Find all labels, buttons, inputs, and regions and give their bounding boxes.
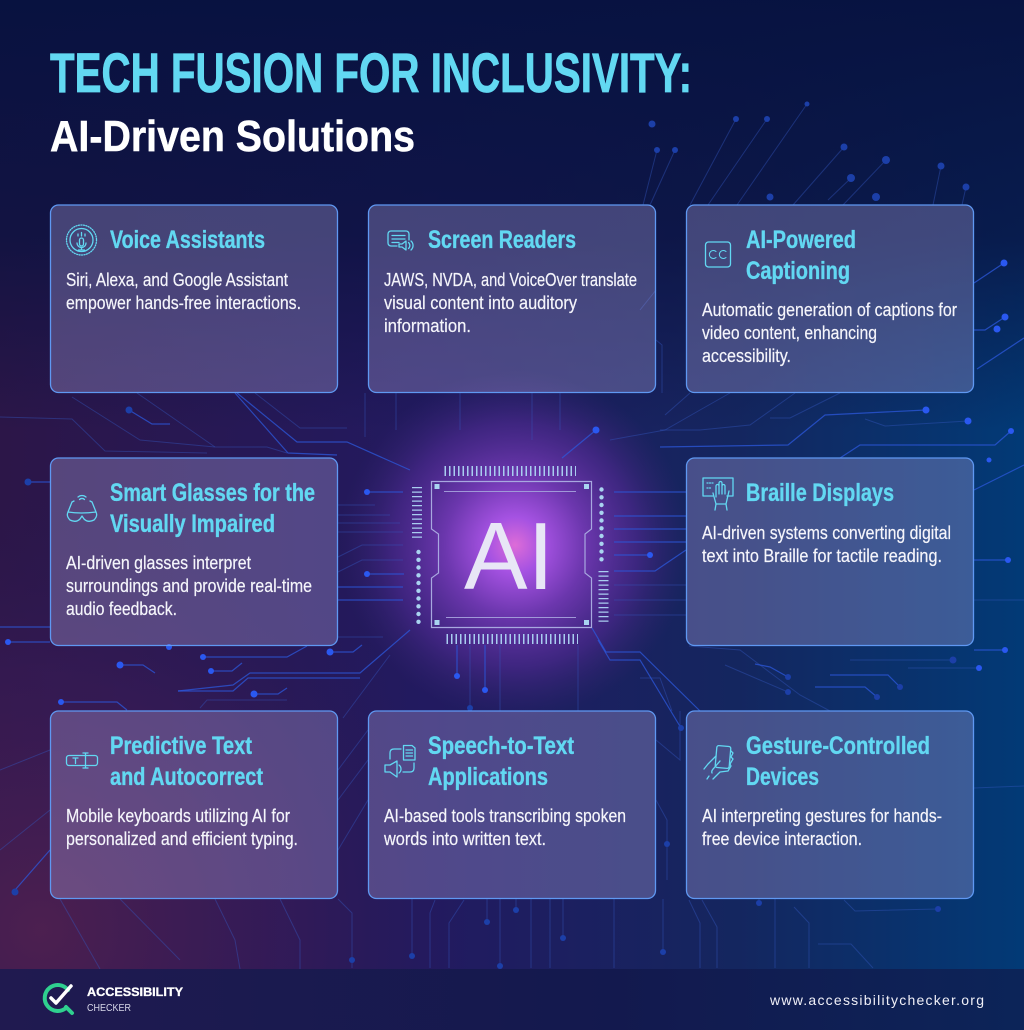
heading: Braille Displays (746, 479, 894, 507)
body text (384, 269, 637, 336)
icon: smart glasses (67, 495, 97, 521)
body text (66, 805, 298, 849)
heading: AI-Powered (746, 226, 856, 254)
panel: Braille Displays (686, 458, 974, 646)
icon: braille hand (703, 478, 733, 510)
icon: speech to document (385, 746, 415, 777)
heading (110, 732, 264, 791)
chip bottom pins (446, 634, 578, 644)
heading: Predictive Text (110, 732, 253, 760)
heading: Captioning (746, 257, 850, 285)
chip left dots (416, 550, 421, 624)
heading (110, 479, 315, 538)
panel: AI-Powered Captioning (686, 205, 974, 392)
heading: and Autocorrect (110, 763, 264, 791)
heading (428, 732, 575, 791)
body text: Siri, Alexa, and Google Assistant (66, 269, 288, 290)
heading (746, 732, 930, 791)
chip left pins (412, 487, 422, 541)
icon: voice microphone (66, 225, 96, 255)
panel: Smart Glasses (50, 458, 338, 646)
body text: free device interaction. (702, 828, 862, 849)
body text: audio feedback. (66, 598, 177, 619)
body text: Mobile keyboards utilizing AI for (66, 805, 290, 826)
chip outline (432, 482, 592, 628)
title: TECH FUSION FOR INCLUSIVITY: (50, 41, 692, 104)
logo wordmark: ACCESSIBILITY (87, 985, 183, 999)
body text (702, 522, 951, 566)
body text: text into Braille for tactile reading. (702, 545, 942, 566)
panel: Gesture-Controlled Devices (686, 711, 974, 898)
body text: personalized and efficient typing. (66, 828, 298, 849)
body text: information. (384, 315, 471, 336)
logo wordmark (87, 985, 183, 1014)
body text (383, 805, 626, 849)
heading: Screen Readers (428, 226, 576, 254)
heading: Gesture-Controlled (746, 732, 930, 760)
panel: Predictive Text and Autocorrect (50, 711, 338, 898)
heading: Speech-to-Text (428, 732, 575, 760)
body text: AI-driven glasses interpret (66, 552, 251, 573)
chip right dots (599, 487, 604, 562)
panel: Speech-to-Text Applications (368, 711, 656, 898)
icon: hand holding phone (704, 745, 733, 779)
panel: Screen Readers (368, 205, 656, 392)
body text: Automatic generation of captions for (702, 299, 957, 320)
chip top pins (444, 466, 576, 476)
icon: text cursor field (66, 753, 98, 768)
body text: AI interpreting gestures for hands- (702, 805, 942, 826)
body text: JAWS, NVDA, and VoiceOver translate (384, 269, 637, 290)
heading: Devices (746, 763, 819, 791)
body text: empower hands-free interactions. (66, 292, 301, 313)
icon: screen with speaker (388, 231, 413, 250)
body text (66, 269, 301, 313)
icon: closed captions (706, 242, 730, 267)
body text (66, 552, 312, 619)
heading (746, 226, 856, 285)
website url: www.accessibilitychecker.org (769, 992, 984, 1008)
body text: AI-based tools transcribing spoken (384, 805, 626, 826)
body text (702, 805, 942, 849)
body text: accessibility. (702, 345, 791, 366)
heading: Applications (428, 763, 548, 791)
footer bar (0, 969, 1024, 1030)
body text: surroundings and provide real-time (66, 575, 312, 596)
body text: visual content into auditory (384, 292, 578, 313)
body text: AI-driven systems converting digital (702, 522, 951, 543)
title: AI-Driven Solutions (50, 112, 415, 161)
logo mark (45, 985, 72, 1013)
body text (702, 299, 957, 366)
heading: Voice Assistants (110, 226, 265, 254)
panel: Voice Assistants (50, 205, 338, 392)
body text: words into written text. (383, 828, 546, 849)
chip right pins (598, 571, 608, 625)
logo wordmark: CHECKER (87, 1003, 131, 1014)
body text: video content, enhancing (702, 322, 877, 343)
AI chip (416, 471, 604, 639)
heading: Visually Impaired (110, 510, 275, 538)
chip label AI: AI (464, 503, 554, 610)
chip inner details (434, 484, 589, 625)
title (50, 41, 692, 161)
heading: Smart Glasses for the (110, 479, 315, 507)
